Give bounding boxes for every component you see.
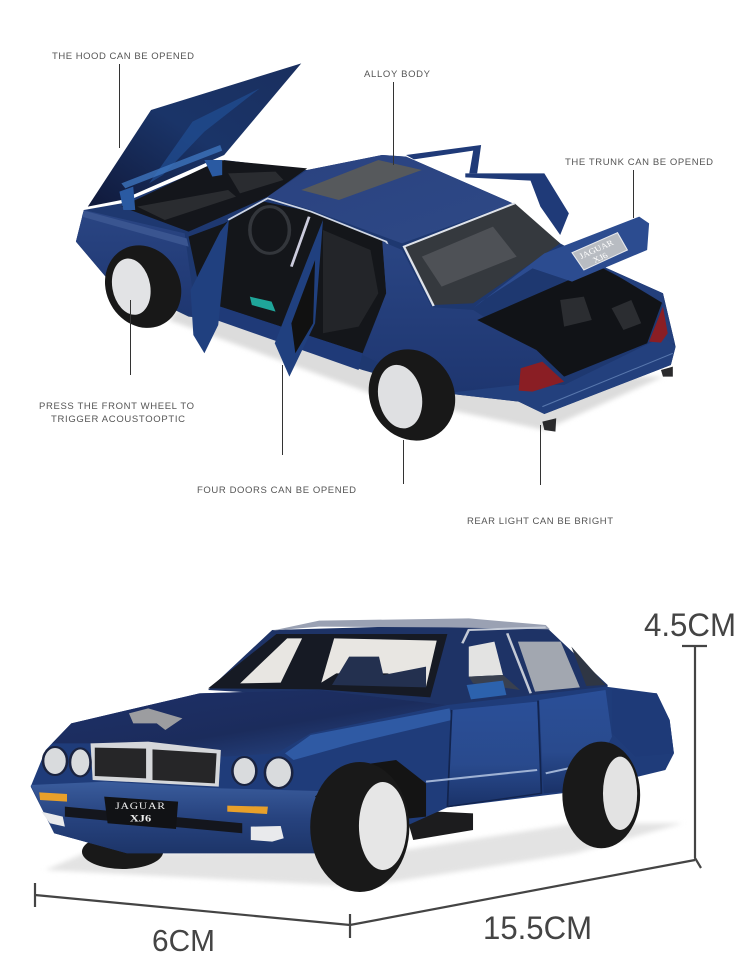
front fender top highlight (82, 211, 189, 247)
hood inner brace (121, 145, 222, 188)
trunk lining (560, 297, 641, 330)
front bumper (31, 782, 341, 853)
label: trunk: THE TRUNK CAN BE OPENED (565, 157, 713, 168)
lower intake (65, 807, 242, 833)
exhaust tips (542, 367, 673, 432)
rear quarter window (571, 647, 606, 686)
taillight left (519, 362, 564, 392)
left headlights (43, 747, 91, 776)
dimension: height: 4.5CM (644, 607, 736, 643)
front wheel (310, 762, 409, 892)
label: front wheel (39, 401, 194, 425)
taillight right (649, 307, 668, 343)
wheel arch (315, 760, 426, 823)
trunk interior (477, 267, 663, 377)
dimension: width: 6CM (152, 923, 215, 958)
side mirror (467, 681, 506, 699)
front wheel (96, 239, 190, 334)
door seams (447, 701, 541, 807)
undercarriage (405, 810, 473, 840)
rear side window (518, 642, 580, 692)
top car: all doors, hood and trunk opened (76, 63, 676, 447)
hood (52, 690, 447, 757)
front open door (191, 220, 229, 353)
windshield (208, 634, 447, 697)
seats (323, 230, 378, 333)
license plate (104, 797, 178, 829)
label: hood: THE HOOD CAN BE OPENED (52, 51, 194, 62)
rear window (404, 203, 560, 305)
grille chrome surround (91, 742, 221, 787)
interior (189, 202, 386, 353)
grille slats (95, 748, 217, 783)
fender highlight (285, 708, 452, 760)
engine detail (137, 172, 283, 220)
rear wheel (359, 342, 465, 447)
steering wheel (250, 207, 289, 253)
middle open door (275, 220, 323, 377)
ground shadow (169, 293, 663, 430)
chrome roof trim (228, 198, 402, 277)
door side molding (426, 764, 588, 782)
license plate: XJ6 (130, 813, 152, 824)
sunroof (301, 160, 422, 200)
door chrome (291, 217, 309, 267)
engine bay (121, 160, 307, 232)
main body (31, 687, 674, 853)
front fender and side (76, 210, 196, 320)
teal seat detail (250, 297, 276, 312)
label: front wheel: TRIGGER ACOUSTOOPTIC (51, 414, 185, 425)
hood leaper ornament (129, 708, 182, 730)
label: rear light: REAR LIGHT CAN BE BRIGHT (467, 516, 613, 527)
ground shadow (46, 823, 682, 887)
trunk plate (572, 233, 627, 270)
trunk plate: XJ6 (591, 250, 610, 265)
bottom car: front three-quarter view (31, 618, 682, 892)
trunk lid raised (473, 217, 649, 308)
roof (268, 155, 513, 243)
rear fender (612, 690, 674, 757)
greenhouse pillars (208, 625, 608, 710)
seats behind windshield (332, 657, 426, 687)
label: alloy body: ALLOY BODY (364, 69, 431, 80)
rear bumper (446, 337, 676, 414)
sill under doors (216, 307, 363, 370)
rear wheel (562, 742, 640, 848)
body silhouette base (76, 155, 676, 414)
label: doors: FOUR DOORS CAN BE OPENED (197, 485, 356, 496)
rear window chrome (404, 203, 515, 306)
hood strut (119, 160, 222, 210)
right trunk edge (600, 265, 675, 347)
right headlights (232, 757, 292, 788)
window chrome frame (462, 627, 546, 693)
label: front wheel: PRESS THE FRONT WHEEL TO (39, 401, 194, 412)
trunk plate: JAGUAR (577, 238, 615, 261)
leader lines (120, 64, 634, 485)
hood raised (88, 63, 301, 207)
front side window (469, 642, 503, 677)
fog lamps (41, 812, 284, 842)
rear quarter panel (363, 242, 564, 393)
doors (447, 702, 541, 807)
bumper highlight (542, 353, 673, 407)
front window dark lower part (469, 675, 520, 690)
left front tyre (82, 834, 163, 869)
windshield bright patches (240, 638, 437, 687)
door inner panel (291, 260, 315, 353)
roof (272, 618, 550, 631)
dimension: length: 15.5CM (483, 910, 592, 946)
far side open door frames (406, 145, 569, 235)
hood reflections (149, 88, 260, 183)
rear seats in window (422, 227, 517, 287)
license plate: JAGUAR (115, 802, 166, 812)
indicators (39, 792, 268, 814)
dimension lines (35, 646, 707, 938)
